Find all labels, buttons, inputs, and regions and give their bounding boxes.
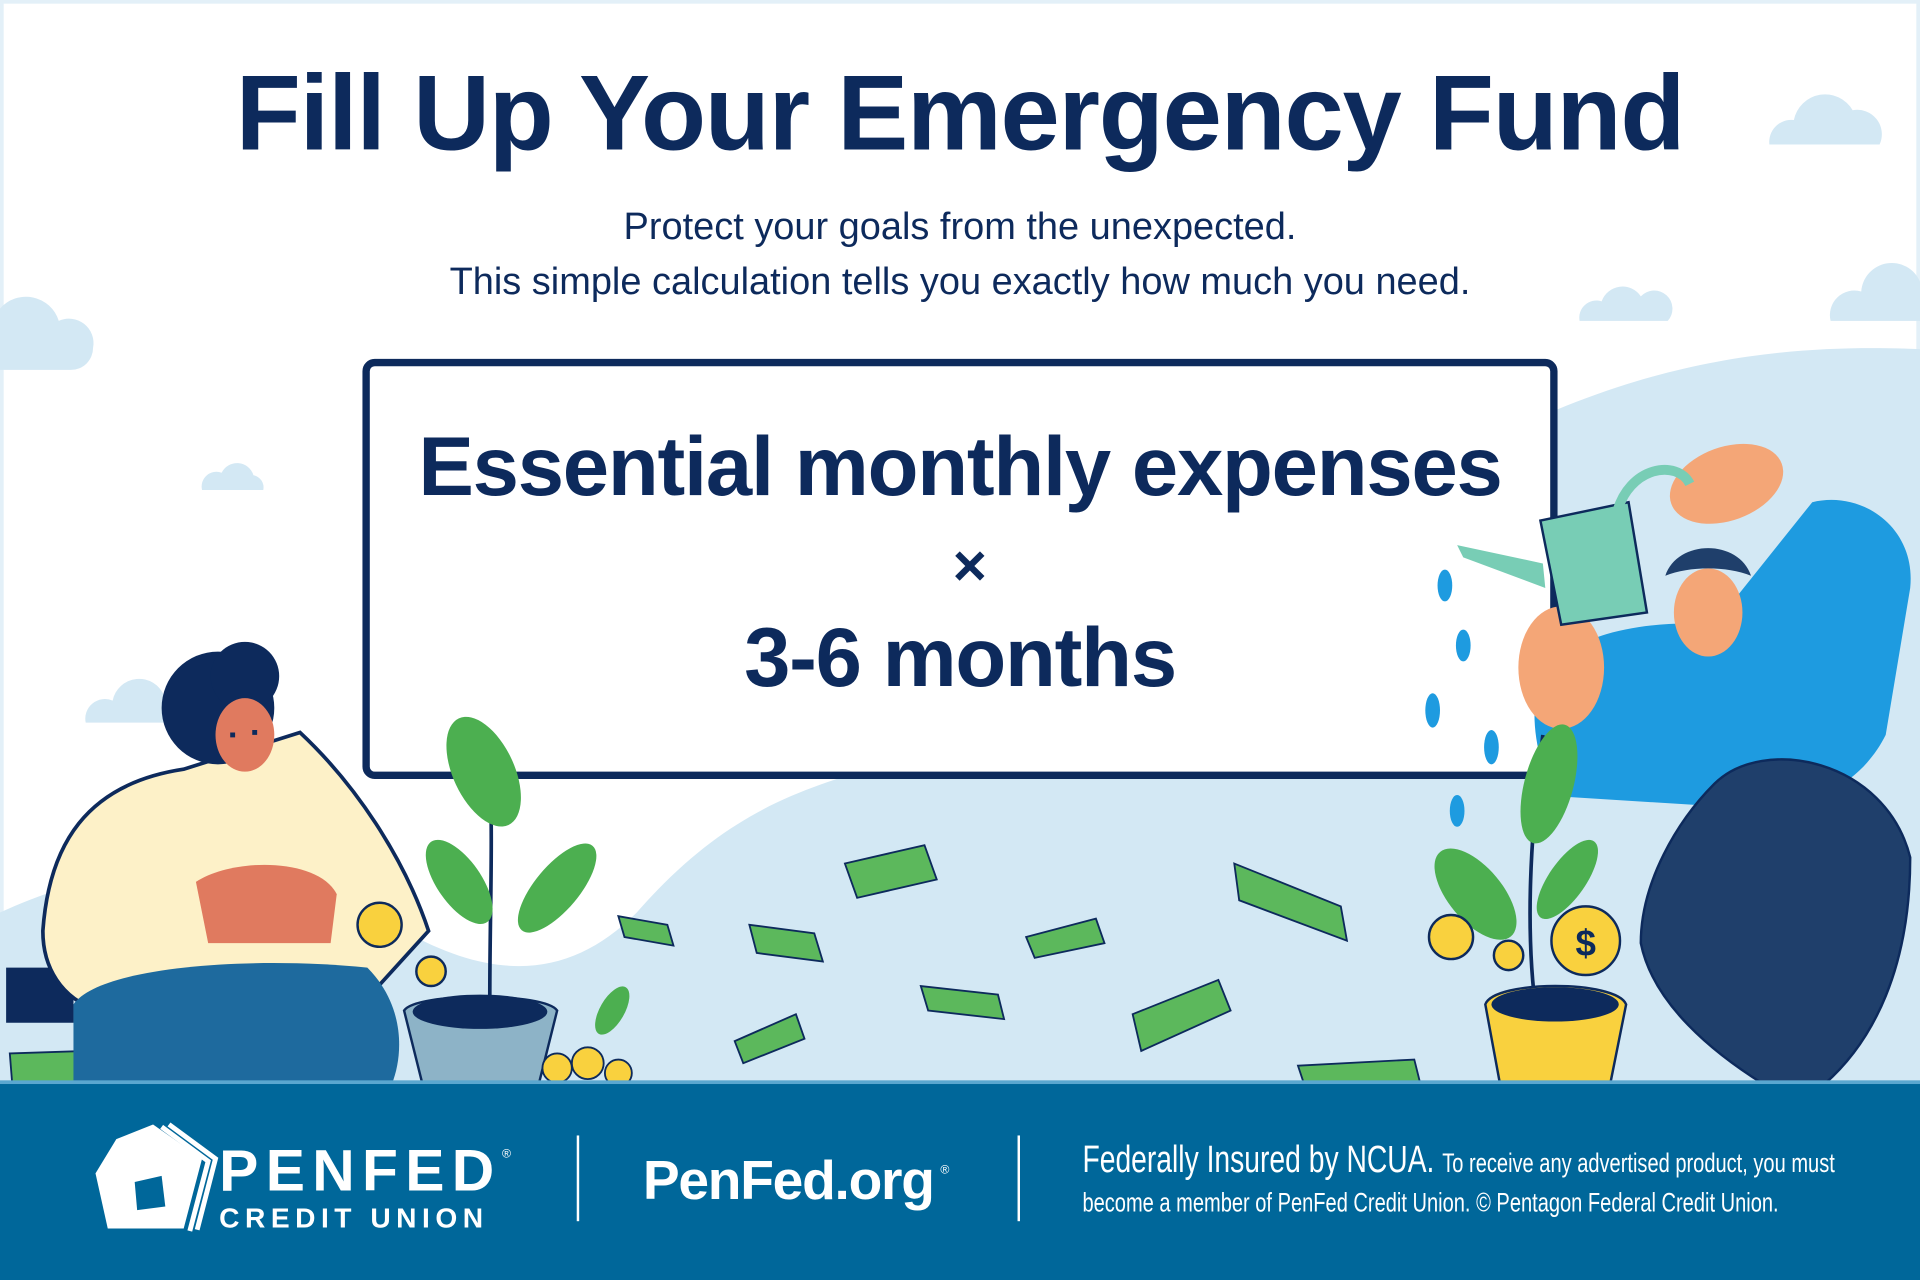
multiply sign: × <box>953 533 987 598</box>
disclaimer: become a member of PenFed Credit Union. © Pentagon Federal Credit Union. <box>1082 1188 1779 1218</box>
holding hand <box>1518 606 1604 729</box>
title: Fill Up Your Emergency Fund <box>236 53 1684 172</box>
watering can <box>1457 470 1690 625</box>
subtitle: Protect your goals from the unexpected. <box>624 206 1296 248</box>
background hill <box>0 348 1920 1084</box>
hair <box>162 652 274 764</box>
footer <box>0 1080 1920 1280</box>
left person <box>6 642 446 1084</box>
right plant with coins and pot: $ <box>1575 922 1596 963</box>
left plant with pot <box>404 705 636 1086</box>
subtitle: This simple calculation tells you exactly how much you need. <box>450 261 1470 303</box>
clouds <box>0 94 1920 723</box>
hands <box>196 865 337 943</box>
face <box>216 698 274 772</box>
water drops <box>1425 570 1499 827</box>
raised arm hand <box>1659 429 1794 538</box>
formula text: essential monthly expenses: Essential monthly expenses <box>418 420 1502 513</box>
formula text: months: 3-6 months <box>744 611 1176 704</box>
footer: ® <box>502 1147 511 1161</box>
pot <box>404 997 557 1084</box>
formula box <box>366 363 1554 775</box>
small sprout and coins <box>588 981 636 1040</box>
head <box>1674 568 1742 657</box>
sweater <box>43 732 429 1011</box>
logo wordmark: PENFED <box>219 1139 502 1204</box>
disclaimer: Federally Insured by NCUA. To receive any advertised product, you must <box>1082 1139 1835 1181</box>
pants <box>73 963 399 1084</box>
floating money bills <box>10 845 1420 1084</box>
subtitle <box>450 206 1470 303</box>
website: PenFed.org <box>643 1149 934 1211</box>
disclaimer <box>1082 1139 1835 1218</box>
pants <box>1641 759 1910 1084</box>
right plant with coins and pot <box>1419 718 1626 1084</box>
coins in hand <box>358 903 446 986</box>
footer: ® <box>940 1162 949 1176</box>
footer: CREDIT UNION <box>219 1202 489 1233</box>
shirt <box>1534 500 1911 808</box>
right person <box>1518 429 1911 1084</box>
yellow pot <box>1485 986 1626 1084</box>
logo icon <box>96 1124 216 1231</box>
